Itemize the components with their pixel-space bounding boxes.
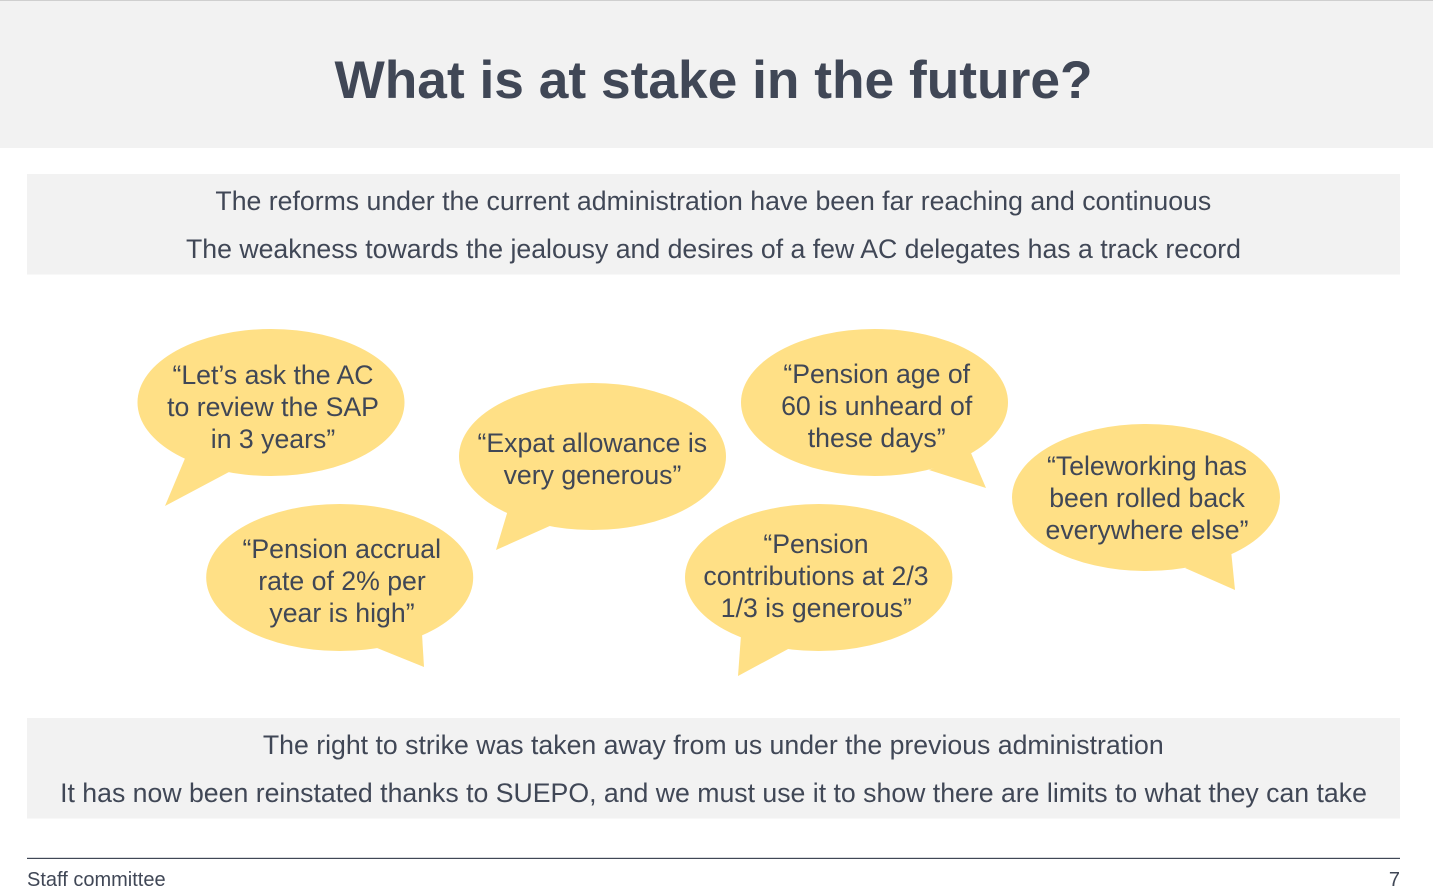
speech bubble: pension accrual [206, 504, 473, 667]
panel: bottom statement: The right to strike was taken away from us under the previous administration [263, 730, 1164, 760]
footer: Staff committee [27, 869, 166, 891]
speech bubble: pension accrual: rate of 2% per [258, 566, 426, 596]
speech bubble: teleworking: been rolled back [1049, 483, 1245, 513]
speech bubble: pension contributions: contributions at 2/3 [703, 561, 929, 591]
speech bubble: pension age: “Pension age of [783, 359, 971, 389]
header band [0, 0, 1433, 148]
speech bubble: pension contributions: 1/3 is generous” [721, 593, 912, 623]
panel: top statement [27, 174, 1400, 274]
speech bubble: expat allowance: very generous” [504, 460, 681, 490]
footer: 7 [1389, 869, 1400, 891]
speech bubble: teleworking [1012, 424, 1280, 590]
speech bubble: expat allowance [459, 383, 726, 550]
speech bubble: pension contributions [685, 504, 952, 676]
speech bubble: review the SAP: to review the SAP [167, 392, 379, 422]
speech bubble: expat allowance: “Expat allowance is [477, 428, 707, 458]
speech bubble: pension age [741, 329, 1008, 488]
speech bubble: review the SAP [138, 329, 404, 506]
speech bubble: pension age: these days” [808, 423, 946, 453]
speech bubble: pension contributions: “Pension [763, 529, 869, 559]
panel: bottom statement: It has now been reinstated thanks to SUEPO, and we must use it to show there are limits to what they can take [60, 778, 1367, 808]
speech bubble: review the SAP: “Let’s ask the AC [172, 360, 374, 390]
speech bubble: teleworking: “Teleworking has [1047, 451, 1247, 481]
panel: top statement: The weakness towards the jealousy and desires of a few AC delegates has a track record [186, 234, 1241, 264]
speech bubble: teleworking: everywhere else” [1046, 515, 1248, 545]
title: What is at stake in the future? [334, 51, 1093, 110]
speech bubble: pension accrual: year is high” [269, 598, 415, 628]
speech bubble: review the SAP: in 3 years” [211, 424, 335, 454]
speech bubble: pension accrual: “Pension accrual [243, 534, 441, 564]
speech bubble: pension age: 60 is unheard of [781, 391, 973, 421]
panel: top statement: The reforms under the current administration have been far reaching and continuous [215, 186, 1211, 216]
panel: bottom statement [27, 718, 1400, 818]
footer [27, 858, 1400, 891]
